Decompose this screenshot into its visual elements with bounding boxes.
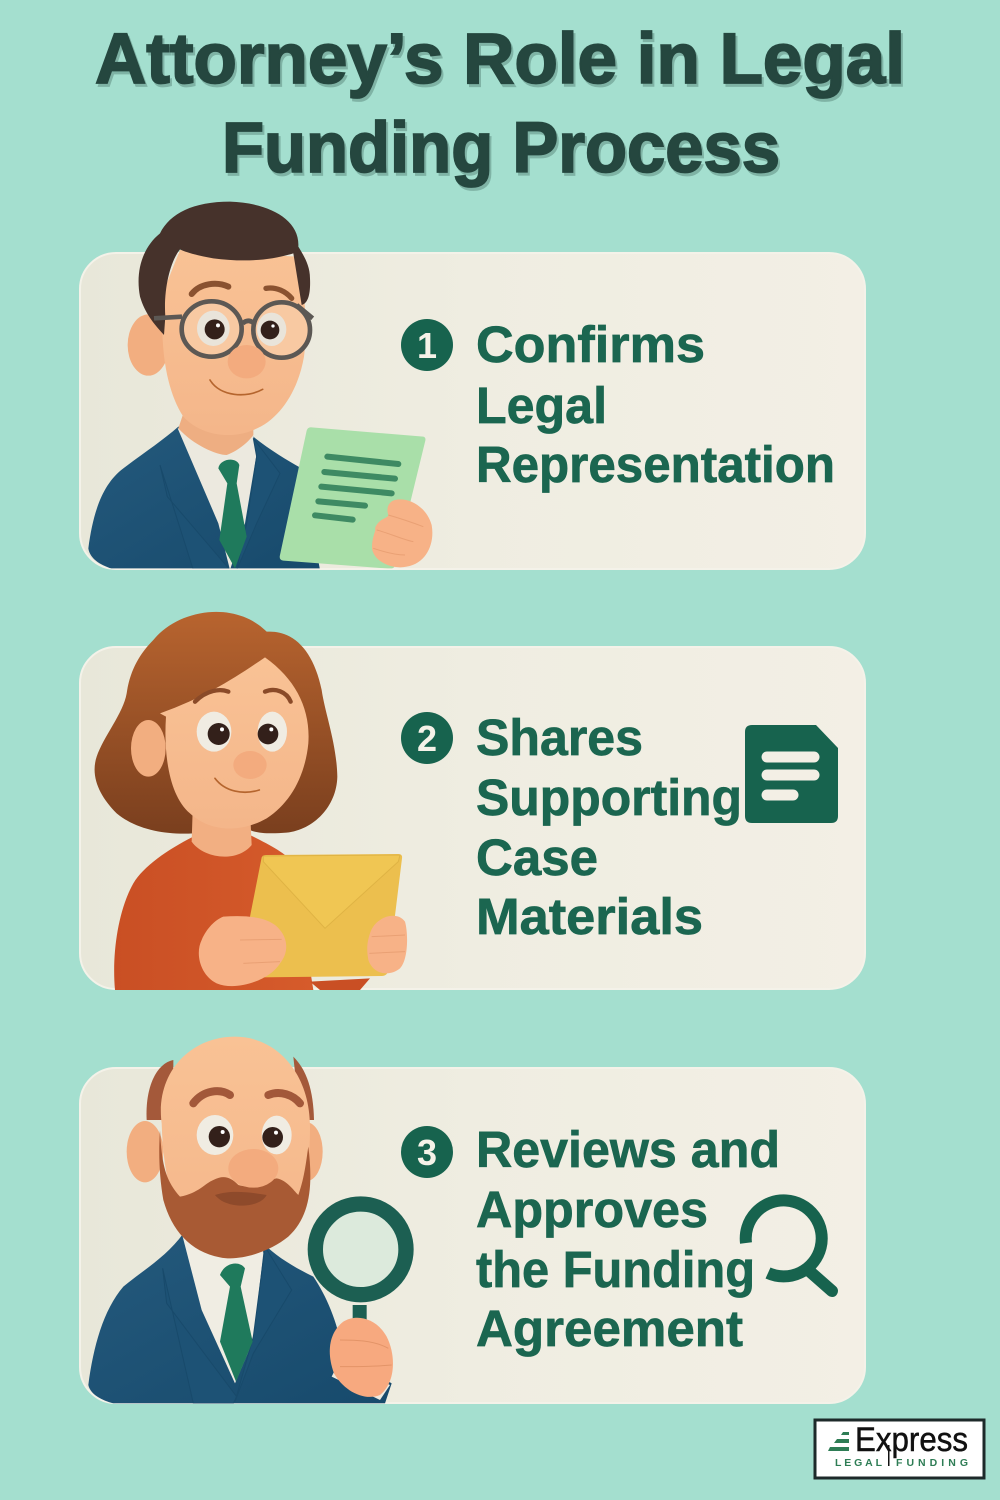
panel: step 1 card bbox=[80, 253, 865, 569]
text: step 3 label: Approves bbox=[476, 1181, 708, 1238]
text: step 1 label: Representation bbox=[476, 436, 835, 493]
text: step 2 label: Case bbox=[476, 829, 598, 886]
panel: step 2 card bbox=[80, 647, 865, 989]
title bbox=[95, 20, 907, 191]
text: step 1 label bbox=[476, 316, 835, 493]
title: Funding Process bbox=[224, 112, 782, 191]
text: step 2 label bbox=[476, 709, 742, 945]
icon: number 3 badge: 3 bbox=[417, 1132, 437, 1173]
text: step 3 label bbox=[476, 1121, 780, 1357]
illustration: woman holding yellow envelope bbox=[95, 612, 407, 990]
title: Funding Process bbox=[222, 109, 780, 188]
illustration: attorney with glasses holding document bbox=[88, 202, 432, 570]
text: step 1 label: Confirms bbox=[476, 316, 705, 373]
logo: Express Legal Funding bbox=[815, 1420, 984, 1478]
icon: document bbox=[745, 725, 838, 823]
text: step 2 label: Shares bbox=[476, 709, 643, 766]
icon: number 1 badge bbox=[401, 319, 453, 371]
text: step 2 label: Supporting bbox=[476, 769, 742, 826]
icon: magnifying glass bbox=[746, 1200, 832, 1291]
text: step 3 label: Reviews and bbox=[476, 1121, 780, 1178]
text: step 3 label: Agreement bbox=[476, 1300, 743, 1357]
title: Attorney’s Role in Legal bbox=[97, 23, 907, 102]
illustration: bald bearded attorney with magnifying glass bbox=[88, 1037, 406, 1403]
icon: number 1 badge: 1 bbox=[417, 325, 437, 366]
logo: Express Legal Funding: Express bbox=[855, 1421, 968, 1459]
text: step 2 label: Materials bbox=[476, 888, 703, 945]
logo: Express Legal Funding: FUNDING bbox=[896, 1457, 968, 1469]
icon: number 2 badge bbox=[401, 712, 453, 764]
icon: number 3 badge bbox=[401, 1126, 453, 1178]
logo: Express Legal Funding: LEGAL bbox=[835, 1457, 883, 1469]
icon: number 2 badge: 2 bbox=[417, 718, 437, 759]
text: step 3 label: the Funding bbox=[476, 1241, 755, 1298]
title: Attorney’s Role in Legal bbox=[95, 20, 905, 99]
panel: step 3 card bbox=[80, 1068, 865, 1403]
text: step 1 label: Legal bbox=[476, 377, 607, 434]
